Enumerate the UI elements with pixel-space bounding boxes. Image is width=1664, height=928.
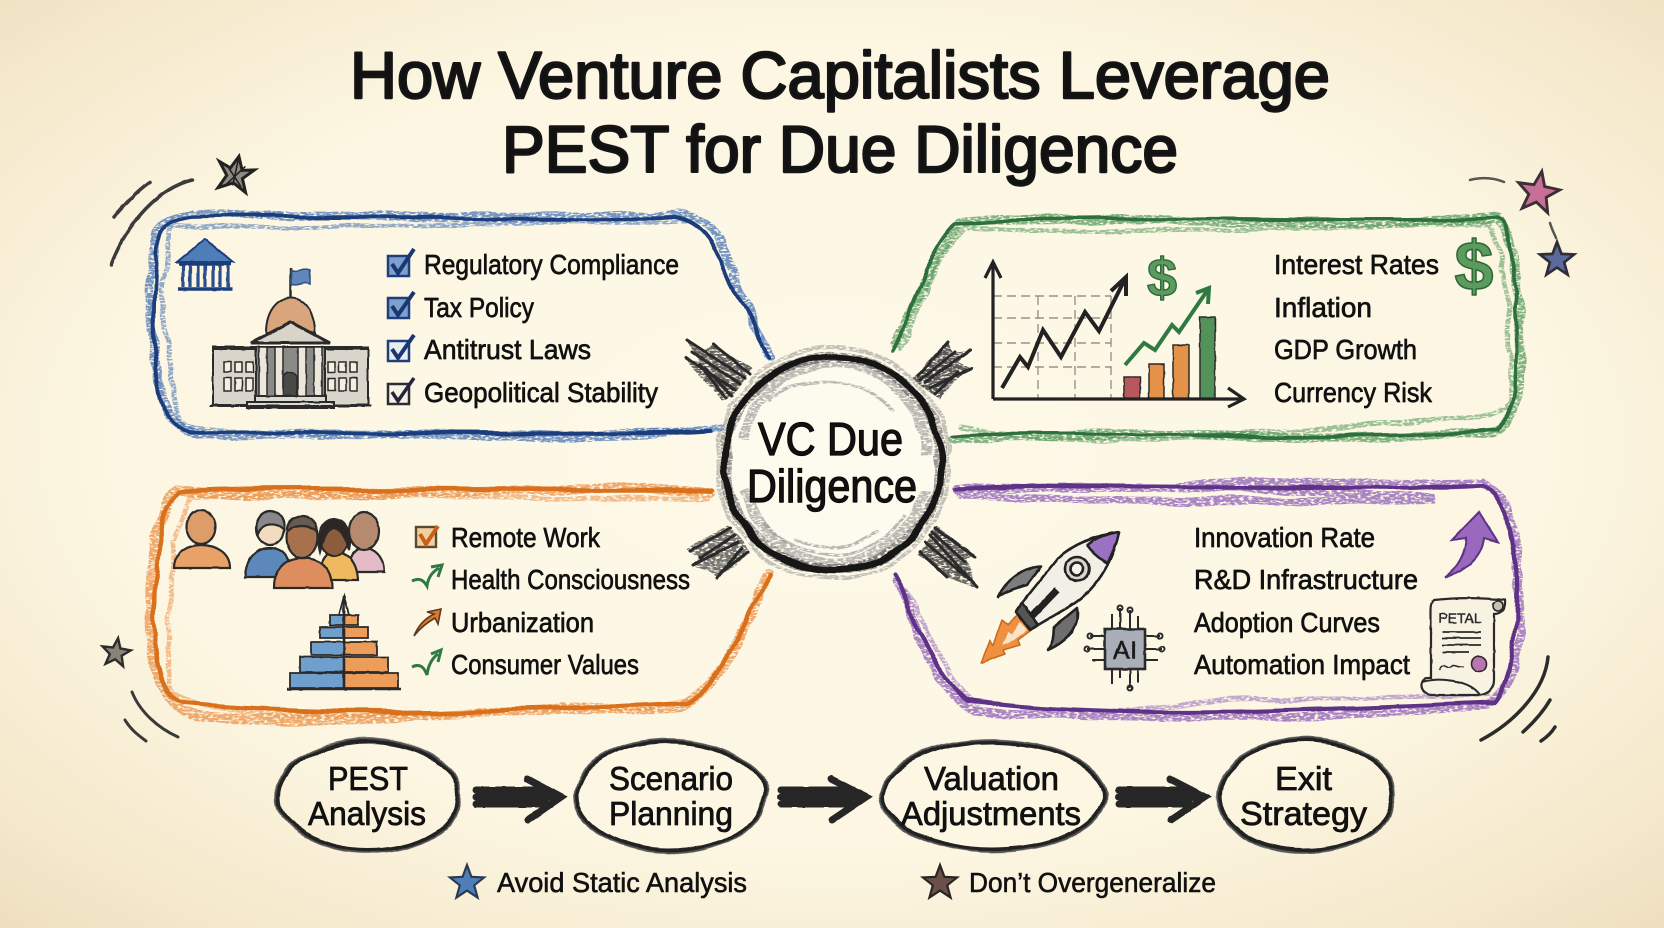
technological list: R&D Infrastructure <box>1194 564 1418 595</box>
icon: purple up arrow <box>1445 512 1498 577</box>
icon: top-left star <box>214 153 257 194</box>
item: Remote Work: Remote Work <box>451 522 601 553</box>
center hub: VC Due Diligence <box>685 340 977 587</box>
step: Exit Strategy <box>1216 739 1394 853</box>
item: Geopolitical Stability: Geopolitical Stability <box>424 377 658 408</box>
item: Consumer Values: Consumer Values <box>451 649 639 680</box>
step: Scenario Planning: Scenario <box>609 760 733 797</box>
icon: blue star <box>1540 242 1574 275</box>
swoosh: top-left <box>111 180 192 265</box>
step: PEST Analysis: Analysis <box>308 795 426 832</box>
title <box>350 38 1330 186</box>
rocket fins <box>998 567 1041 597</box>
technological list: Automation Impact <box>1194 649 1410 680</box>
item: Regulatory Compliance: Regulatory Compliance <box>424 249 679 280</box>
economic list <box>1274 249 1439 408</box>
item: Antitrust Laws: Antitrust Laws <box>424 334 591 365</box>
bars <box>1124 317 1215 399</box>
panel: economic (green) <box>891 218 1520 440</box>
hub text: VC Due <box>758 413 903 465</box>
rocket flame <box>981 612 1034 663</box>
step: Exit Strategy: Strategy <box>1240 795 1368 832</box>
technological list: Adoption Curves <box>1194 607 1380 638</box>
item: Urbanization: Urbanization <box>451 607 594 638</box>
hub text <box>747 413 917 512</box>
icon: small dollar: $ <box>1147 248 1177 308</box>
panel outline <box>891 218 1520 440</box>
technological list <box>1194 522 1418 680</box>
item: Tax Policy <box>388 292 534 323</box>
step: Scenario Planning: Planning <box>609 795 733 832</box>
panel: social (orange) <box>150 489 770 720</box>
hub circle <box>717 347 949 579</box>
swoosh: bottom-right <box>1481 657 1555 741</box>
step: Exit Strategy: Exit <box>1275 760 1332 797</box>
step: Valuation Adjustments: Valuation <box>924 760 1059 797</box>
step: PEST Analysis <box>276 739 460 853</box>
panel outline <box>151 212 770 437</box>
green trend arrow <box>1125 288 1209 365</box>
item: Tax Policy: Tax Policy <box>424 292 534 323</box>
economic list: Interest Rates <box>1274 249 1439 280</box>
panel outline <box>150 489 770 720</box>
icon: bank <box>177 239 233 289</box>
process flow <box>276 739 1394 853</box>
economic list: GDP Growth <box>1274 334 1417 365</box>
icon: AI chip <box>1084 606 1164 690</box>
arrow 1 <box>476 779 561 820</box>
swoosh: top-right <box>1470 178 1556 238</box>
icon: big dollar: $ <box>1455 227 1493 305</box>
title: How Venture Capitalists Leverage <box>350 38 1330 112</box>
panel: political (blue) <box>151 212 770 437</box>
step: PEST Analysis: PEST <box>328 760 408 797</box>
icon: rocket <box>981 532 1119 663</box>
social list <box>412 522 690 680</box>
technological list: Innovation Rate <box>1194 522 1375 553</box>
icon: pink star <box>1514 168 1562 214</box>
title: PEST for Due Diligence <box>502 112 1178 186</box>
step: Scenario Planning <box>574 739 766 853</box>
grid lines <box>993 296 1111 399</box>
icon: left star <box>100 636 132 667</box>
hub tufts <box>685 340 977 587</box>
step: Valuation Adjustments: Adjustments <box>901 795 1081 832</box>
note: Don't Overgeneralize: Don’t Overgeneralize <box>969 867 1216 898</box>
arrow 2 <box>781 779 866 820</box>
step: Valuation Adjustments <box>880 740 1106 852</box>
panel outline <box>894 482 1520 716</box>
icon: AI chip: AI <box>1113 635 1137 665</box>
economic list: Inflation <box>1274 292 1372 323</box>
arrow 3 <box>1119 779 1205 820</box>
chart: growth chart <box>985 248 1244 407</box>
item: Health Consciousness: Health Consciousness <box>451 564 690 595</box>
icon: patent scroll <box>1421 598 1505 695</box>
icon: group of people <box>245 511 384 588</box>
economic list: Currency Risk <box>1274 377 1433 408</box>
axes <box>985 262 1244 407</box>
panel: technological (purple) <box>894 482 1520 716</box>
decorative stars and swooshes <box>100 153 1574 741</box>
icon: capitol building <box>210 268 371 408</box>
icon: single person <box>174 510 230 568</box>
swoosh: bottom-left <box>125 692 178 741</box>
hub text: Diligence <box>747 460 917 512</box>
rocket body <box>1022 532 1119 625</box>
icon: patent scroll: PETAL <box>1438 610 1482 626</box>
note: Avoid Static Analysis: Avoid Static Analysis <box>497 867 747 898</box>
political list <box>388 249 679 408</box>
icon: population pyramid <box>287 596 401 690</box>
black trend line <box>1002 277 1126 388</box>
